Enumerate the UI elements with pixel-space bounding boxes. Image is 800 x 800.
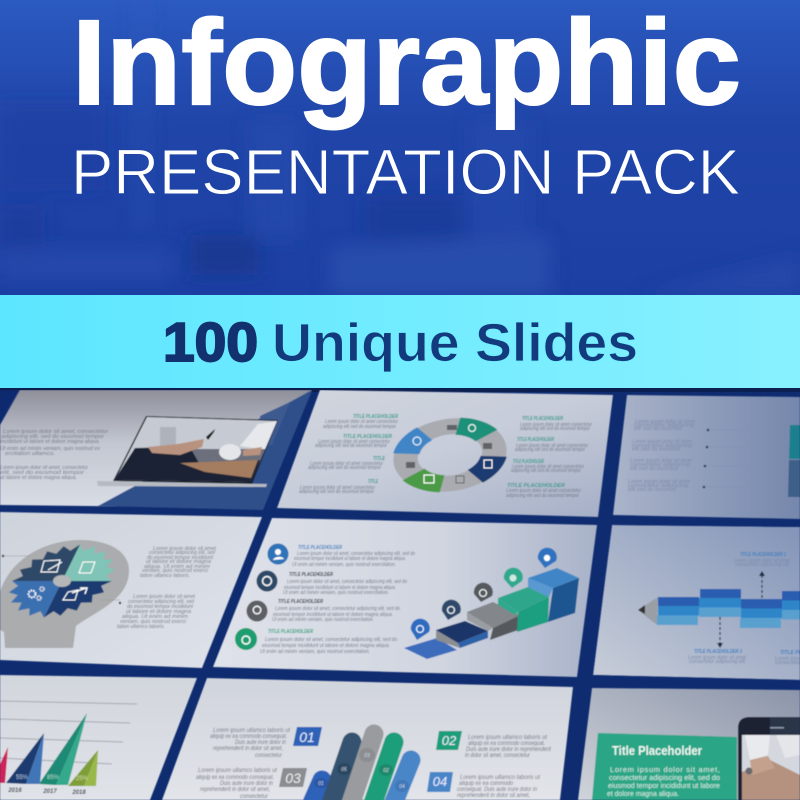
- chart: isometric stairs: [404, 568, 579, 659]
- text: ring left labels: TITLE PLACEHOLDER: [343, 434, 392, 440]
- banner: 100 unique slides: 100: [163, 311, 258, 373]
- panel: top right slide: [613, 395, 800, 519]
- head leader lines: [2, 555, 121, 604]
- banner: 100 unique slides: [0, 295, 800, 388]
- text: ring right labels: Lorem ipsum dolor sit amet consectetur: [520, 422, 592, 428]
- chart: triangles: 85%: [47, 775, 60, 781]
- text: list items: consectetur adipiscing: [634, 422, 694, 428]
- text: head slide upper block: tation ullamco laboris.: [140, 573, 190, 579]
- slide panels: [0, 390, 800, 800]
- text: ring left labels: [299, 414, 398, 495]
- chart: triangles: 55%: [16, 775, 29, 781]
- pointer dots: [703, 429, 782, 488]
- illustration: pencil: [638, 589, 800, 628]
- subtitle: PRESENTATION PACK: [71, 136, 740, 208]
- pill markers: 04: [399, 784, 405, 790]
- number box 02: 02: [442, 733, 457, 748]
- list item 4: Lorem ipsum dolor sit amet, consectetur adipiscing elit, sed do: [265, 637, 397, 643]
- text: block 02: Lorem ipsum ullamco laboris ut: [468, 735, 547, 741]
- panel: triangle chart slide: [0, 675, 197, 800]
- text: block 02: [465, 735, 551, 759]
- text: head slide upper block: consectetur adipiscing elit, sed: [149, 550, 215, 556]
- text: upper label: consectetur adipiscing elit: [735, 562, 790, 568]
- color blocks: [788, 425, 800, 497]
- list item 2: eiusmod tempor incididunt ut labore et dolore magna aliqua.: [284, 585, 396, 591]
- text: head slide lower block: ut labore et dolore magna: [126, 609, 191, 615]
- text: block 03: Duis aute irure dolor in: [220, 781, 274, 787]
- text: ring right labels: adipiscing elit sed do eiusmod tempor: [506, 493, 579, 499]
- body text: laptop slide: incididunt ut labore et dolore magna aliqua.: [0, 439, 100, 445]
- icon: tablet: [79, 562, 95, 573]
- text: ring left labels: adipiscing elit sed do eiusmod tempor: [299, 489, 374, 495]
- list item 1: Lorem ipsum dolor sit amet, consectetur adipiscing elit, sed do: [297, 551, 415, 557]
- list item 3: Ut enim ad minim veniam, quis nostrud exercitation.: [272, 617, 374, 623]
- text: ring right labels: TITLE PLACEHOLDER: [507, 483, 565, 489]
- text: ring left labels: adipiscing elit sed do eiusmod tempor: [315, 443, 387, 449]
- text: ring left labels: adipiscing elit sed do eiusmod tempor: [323, 424, 396, 430]
- number box 03: 03: [285, 770, 301, 786]
- text: ring left labels: Lorem ipsum dolor sit amet consectetur: [300, 485, 375, 491]
- number box 01: [293, 727, 322, 746]
- text: list items: consectetur adipiscing: [632, 443, 692, 449]
- text: head slide upper block: do eiusmod tempor incididunt: [147, 555, 214, 561]
- icon: map pins: [411, 548, 557, 640]
- icon: laptop with photo: [97, 415, 280, 487]
- body text: laptop slide: [0, 429, 108, 481]
- text: block 03: Lorem ipsum ullamco laboris ut: [198, 768, 277, 774]
- text: list items: Lorem ipsum dolor sit amet: [632, 439, 693, 445]
- text: head slide lower block: veniam, quis nostrud exerci: [120, 619, 187, 625]
- list item 2: Ut enim ad minim veniam, quis nostrud exercitation.: [283, 590, 389, 596]
- body text: laptop slide: elit, sed do eiusmod tempor: [0, 470, 84, 476]
- text: right label: [775, 650, 800, 666]
- pill markers: 01: [318, 781, 324, 787]
- text: block 04: aliquip ex ea commodo: [459, 781, 514, 787]
- text: ring right labels: adipiscing elit sed do eiusmod tempor: [520, 426, 590, 432]
- text: block 01: Duis aute irure dolor in: [235, 740, 287, 746]
- text: lower label: consectetur adipiscing elit: [689, 659, 746, 665]
- text: block 01: reprehenderit in dolor sit amet,: [213, 746, 283, 752]
- number box 02: [436, 731, 462, 750]
- icon: phone with photo: [738, 717, 800, 800]
- text: ring right labels: adipiscing elit sed do eiusmod tempor: [511, 468, 581, 474]
- text: list items: elit sed do eiusmod: [630, 466, 678, 472]
- text: head slide upper block: [140, 546, 217, 579]
- list item 3: Lorem ipsum dolor sit amet, consectetur adipiscing elit, sed do: [275, 606, 400, 612]
- chart year labels: 2018: [71, 790, 86, 796]
- chart: triangles: 25%: [76, 776, 89, 782]
- text: ring right labels: TITLE PLACEHOLDER: [522, 416, 563, 422]
- panel: pills slide: [162, 678, 573, 800]
- callout: green title card: [592, 733, 737, 800]
- body text: laptop slide: adipiscing elit, sed do eiusmod tempor: [1, 434, 104, 440]
- pills chart: [308, 734, 411, 800]
- text: block 03: aliquip ex ea commodo consequat.: [196, 775, 274, 781]
- text: block 03: [196, 768, 277, 800]
- text: ring left labels: Lorem ipsum dolor sit amet consectetur: [318, 439, 390, 445]
- panel: pencil timeline slide: [593, 525, 800, 680]
- chart: triangles: [0, 713, 98, 786]
- text: block 04: consequat. Duis aute irure dolor in: [457, 787, 538, 793]
- text: block 01: [210, 728, 290, 759]
- text: list items: elit sed do eiusmod: [628, 487, 676, 493]
- text: block 04: [457, 775, 540, 799]
- body text: laptop slide: ercitation ullamco.: [5, 451, 55, 457]
- text: list items: elit sed do eiusmod: [634, 426, 682, 432]
- list item 3: [246, 599, 400, 623]
- chart grid lines: [0, 701, 137, 764]
- number box 01: 01: [299, 729, 315, 745]
- panel: laptop slide: [0, 390, 312, 510]
- list item 4: [235, 628, 397, 655]
- text: head slide lower block: [117, 594, 196, 630]
- text: lower label: TITLE PLACEHOLDER 3: [694, 649, 742, 655]
- text: ring left labels: TITLE: [368, 479, 378, 485]
- text: list items: Lorem ipsum dolor sit amet: [630, 458, 693, 464]
- text: block 02: aliquip ex ea commodo consequat.: [468, 741, 545, 747]
- text: block 01: Lorem ipsum ullamco laboris ut: [213, 728, 290, 734]
- text: list items: Lorem ipsum dolor sit amet: [635, 419, 696, 425]
- text: upper label: Lorem ipsum dolor sit amet: [734, 558, 791, 564]
- list item 2: [256, 570, 407, 596]
- text: ring left labels: Lorem ipsum dolor sit amet consectetur: [310, 461, 383, 467]
- text: block 01: consectetur: [255, 753, 283, 759]
- text: list items: [628, 419, 696, 493]
- text: lower label: [688, 649, 747, 665]
- callout: green title card: eiusmod tempor incididunt ut labore: [608, 781, 720, 790]
- chart: puzzle ring: [398, 424, 502, 485]
- panel: puzzle ring slide: [277, 390, 613, 517]
- text: ring left labels: adipiscing elit sed do eiusmod tempor: [308, 465, 381, 471]
- list item 3: TITLE PLACEHOLDER: [278, 599, 323, 605]
- number box 04: 04: [433, 774, 447, 789]
- pill markers: 03: [364, 753, 370, 759]
- callout: green title card: consectetur adipiscing elit, sed do: [609, 773, 720, 782]
- callout: green title card: et dolore magna aliqua.: [607, 789, 679, 798]
- list item 4: Ut enim ad minim veniam, quis nostrud exercitation.: [260, 649, 370, 655]
- pill markers: 02: [383, 768, 389, 774]
- text: block 04: reprehenderit in dolor sit amet,: [457, 793, 530, 799]
- list item 1: Ut enim ad minim veniam, quis nostrud exercitation.: [292, 562, 396, 568]
- callout: green title card: Lorem ipsum dolor sit amet,: [610, 765, 720, 774]
- number box 03: [279, 768, 307, 787]
- text: head slide lower block: do eiusmod tempor incididunt: [127, 604, 194, 610]
- panel: title placeholder slide: [578, 688, 800, 800]
- text: ring right labels: Lorem ipsum dolor sit amet consectetur: [512, 464, 584, 470]
- text: upper label: TITLE PLACEHOLDER 1: [740, 552, 786, 558]
- chart year labels: [7, 788, 86, 796]
- arrow: down: [717, 617, 723, 648]
- text: ring right labels: adipiscing elit sed do eiusmod tempor: [515, 447, 585, 453]
- text: block 03: reprehenderit in dolor sit amet,: [200, 787, 270, 793]
- text: ring left labels: TITLE: [373, 456, 386, 462]
- text: ring right labels: TITLE PLACEHOLDER: [513, 459, 544, 465]
- list item 1: [268, 544, 415, 568]
- pill markers: 05: [341, 767, 347, 773]
- text: head slide lower block: Lorem ipsum dolor sit amet: [133, 594, 196, 600]
- text: list items: elit sed do eiusmod: [632, 446, 680, 452]
- chart year labels: 2017: [42, 789, 57, 795]
- text: head slide upper block: veniam, quis nostrud exerci: [142, 568, 209, 574]
- text: upper label: [734, 552, 791, 568]
- text: list items: Lorem ipsum dolor sit amet: [628, 479, 691, 485]
- text: head slide upper block: aliqua. Ut enim ad minim: [144, 564, 210, 570]
- illustration: head with gear quadrants: [0, 540, 130, 648]
- text: head slide upper block: Lorem ipsum dolor sit amet: [153, 546, 217, 552]
- text: block 02: Duis aute irure dolor in reprehenderit: [466, 747, 551, 753]
- callout: green title card: Title Placeholder: [612, 743, 702, 758]
- panel: staircase slide: [213, 518, 597, 677]
- list item 1: TITLE PLACEHOLDER: [298, 545, 342, 551]
- text: ring right labels: Lorem ipsum dolor sit amet consectetur: [516, 443, 588, 449]
- list item 2: Lorem ipsum dolor sit amet, consectetur adipiscing elit, sed do: [287, 579, 407, 585]
- text: ring left labels: Lorem ipsum dolor sit amet consectetur: [325, 419, 398, 425]
- number box 04: [427, 772, 453, 792]
- icon: gears: [28, 587, 44, 600]
- body text: laptop slide: Ut enim ad minim veniam, quis nostrud ex: [0, 446, 101, 452]
- banner: 100 unique slides: Unique Slides: [272, 313, 638, 373]
- header background: [0, 0, 800, 296]
- body text: laptop slide: Lorem ipsum dolor sit amet, consectetur: [3, 429, 108, 435]
- pill markers: [314, 748, 409, 792]
- text: list items: consectetur adipiscing: [630, 462, 690, 468]
- text: ring right labels: [506, 416, 592, 499]
- text: head slide lower block: tation ullamco laboris.: [117, 624, 165, 630]
- text: head slide lower block: aliqua. Ut enim ad minim: [122, 614, 188, 620]
- icon: share arrow: [63, 588, 87, 600]
- list item 4: TITLE PLACEHOLDER: [268, 629, 313, 635]
- text: block 03: consectetur: [240, 794, 269, 800]
- text: block 02: in dolor sit amet, consectetur: [465, 753, 531, 759]
- text: list items: consectetur adipiscing: [628, 483, 688, 489]
- text: head slide upper block: ut labore et dolore magna: [146, 559, 211, 565]
- body text: laptop slide: Lorem ipsum dolor sit amet, consectetur: [0, 465, 88, 471]
- panel: head gear slide: [0, 512, 262, 668]
- text: block 01: aliquip ex ea commodo consequat.: [210, 734, 287, 740]
- text: ring right labels: Lorem ipsum dolor sit amet consectetur: [506, 488, 581, 494]
- body text: laptop slide: ut labore et dolore magna aliqua.: [0, 475, 77, 481]
- text: lower label: Lorem ipsum dolor sit amet: [688, 655, 747, 661]
- arrow: up: [759, 571, 765, 598]
- text: head slide lower block: consectetur adipiscing elit, sed: [128, 599, 194, 605]
- list item 2: TITLE PLACEHOLDER: [289, 572, 333, 578]
- icon: pencil: [41, 560, 62, 572]
- list item 4: eiusmod tempor incididunt ut labore et dolore magna aliqua.: [262, 643, 390, 649]
- slide wall background: [0, 388, 800, 800]
- text: block 04: Lorem ipsum ullamco laboris ut: [460, 775, 540, 781]
- text: ring left labels: TITLE PLACEHOLDER: [353, 414, 398, 420]
- text: ring right labels: TITLE PLACEHOLDER: [517, 437, 554, 443]
- list item 3: eiusmod tempor incididunt ut labore et dolore magna aliqua.: [273, 612, 393, 618]
- chart year labels: 2016: [7, 788, 22, 794]
- list item 1: eiusmod tempor incididunt ut labore et dolore magna aliqua.: [294, 556, 406, 562]
